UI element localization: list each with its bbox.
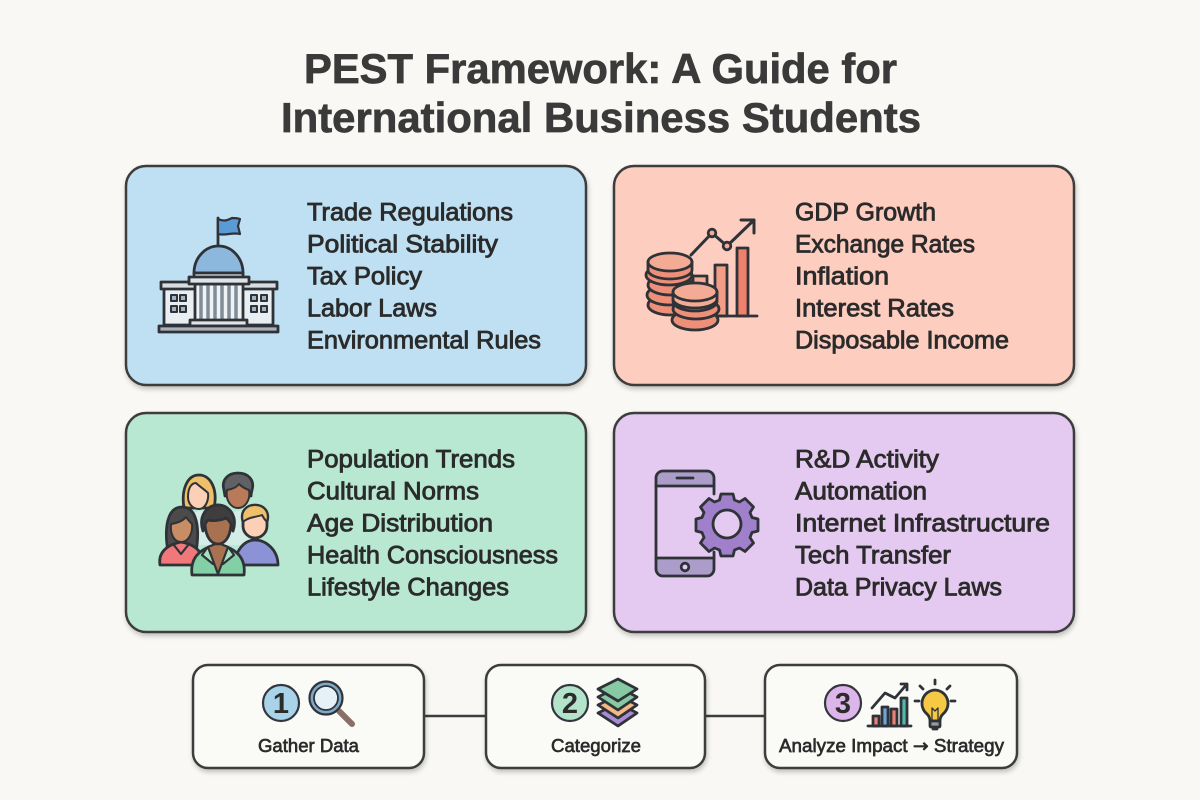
icon: group of people — [160, 473, 278, 575]
icon: coins and growth chart — [646, 220, 757, 330]
list: technological factors — [795, 446, 1050, 602]
list: social factors: Cultural Norms — [307, 478, 479, 506]
list: technological factors: Internet Infrastructure — [795, 510, 1050, 538]
title: International Business Students — [281, 94, 921, 141]
panel: technological — [614, 413, 1074, 632]
number badge 3: 3 — [835, 688, 851, 720]
panel: political — [126, 166, 586, 385]
list: social factors: Population Trends — [307, 446, 515, 474]
icon: phone and gear — [656, 471, 758, 576]
panel: social — [126, 413, 586, 632]
list: economic factors: Disposable Income — [795, 326, 1009, 354]
list: political factors: Labor Laws — [307, 294, 437, 322]
label: categorize: Categorize — [551, 736, 641, 756]
list: social factors — [307, 446, 558, 602]
list: economic factors: Exchange Rates — [795, 230, 975, 258]
list: political factors: Environmental Rules — [307, 326, 541, 354]
title: PEST Framework: A Guide for — [304, 45, 897, 92]
panel: economic — [614, 166, 1074, 385]
list: technological factors: Data Privacy Laws — [795, 574, 1002, 602]
list: social factors: Lifestyle Changes — [307, 574, 509, 602]
title — [281, 45, 921, 141]
list: political factors: Tax Policy — [307, 262, 423, 290]
list: social factors: Health Consciousness — [307, 542, 558, 570]
icon: stacked layers — [598, 679, 637, 726]
icon: light bulb — [915, 680, 955, 729]
list: political factors — [307, 198, 541, 354]
number badge 1: 1 — [273, 688, 289, 720]
number badge 3 — [825, 685, 861, 721]
list: technological factors: Tech Transfer — [795, 542, 951, 570]
connector: step 1 to step 2 — [424, 715, 486, 717]
list: political factors: Trade Regulations — [307, 198, 513, 226]
list: technological factors: R&D Activity — [795, 446, 940, 474]
list: technological factors: Automation — [795, 478, 927, 506]
icon: government building — [159, 218, 278, 332]
icon: mini bar chart — [868, 684, 911, 726]
list: economic factors: Interest Rates — [795, 294, 954, 322]
connector: step 2 to step 3 — [705, 715, 765, 717]
list: economic factors: Inflation — [795, 262, 889, 290]
list: economic factors — [795, 198, 1009, 354]
label: analyze impact to strategy: Analyze Impact → Strategy — [779, 736, 1004, 757]
list: social factors: Age Distribution — [307, 510, 493, 538]
number badge 2 — [552, 685, 588, 721]
step 2: categorize — [486, 665, 705, 768]
list: political factors: Political Stability — [307, 230, 499, 258]
icon: magnifying glass — [310, 682, 352, 724]
label: gather data: Gather Data — [258, 736, 360, 756]
step 1: gather data — [193, 665, 424, 768]
number badge 1 — [263, 685, 299, 721]
list: economic factors: GDP Growth — [795, 198, 936, 226]
number badge 2: 2 — [562, 688, 578, 720]
step 3: analyze impact to strategy — [765, 665, 1017, 768]
